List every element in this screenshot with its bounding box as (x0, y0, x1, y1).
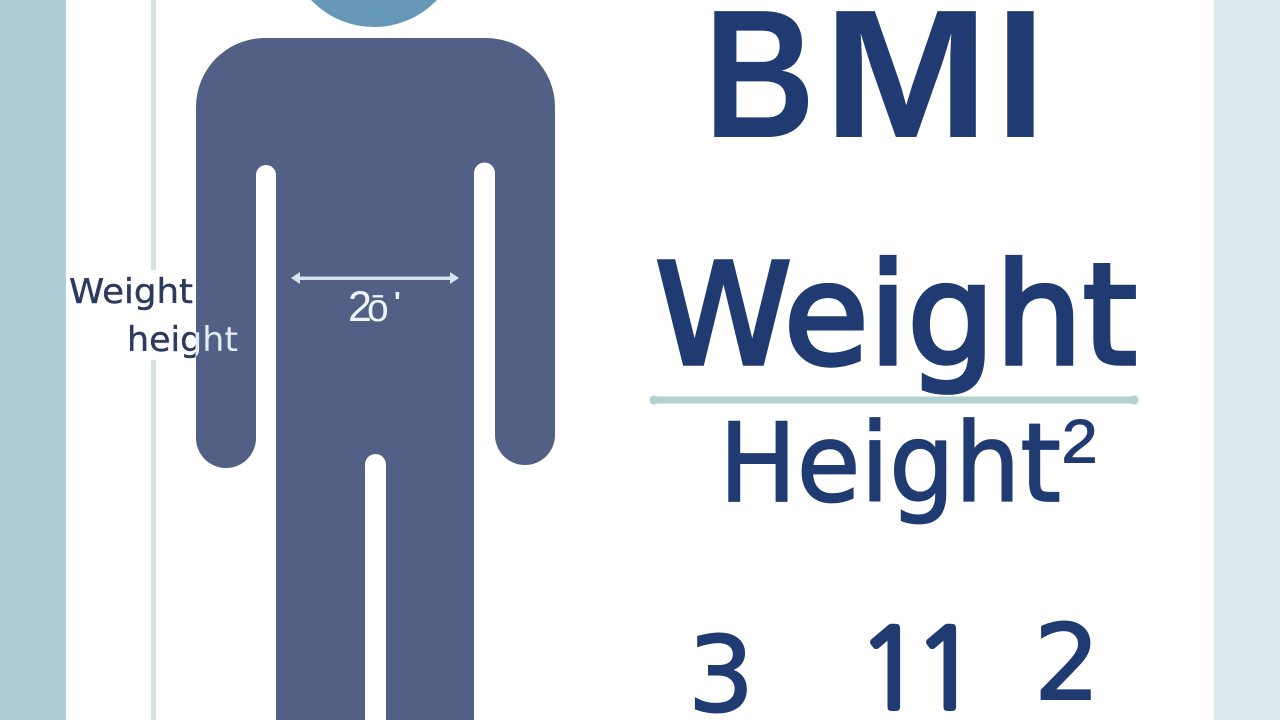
label text: height on white: height (127, 320, 238, 360)
bottom numbers (688, 602, 1100, 720)
right side band (1214, 0, 1280, 720)
waist measurement value: ō (367, 287, 389, 330)
label: weight and height (69, 272, 238, 360)
formula fraction bar (650, 396, 1138, 404)
waist measurement value: ' (394, 286, 401, 317)
formula exponent: ² (1062, 398, 1097, 515)
waist measurement arrow (291, 272, 459, 284)
formula numerator: Weight: Weight (655, 234, 1137, 398)
left side band (0, 0, 66, 720)
label text: Weight: Weight (69, 272, 193, 312)
label text: height on body: height (127, 320, 238, 360)
icon: head (287, 0, 461, 27)
height measuring line (151, 0, 156, 720)
formula denominator: Height: Height (719, 400, 1061, 527)
formula (650, 234, 1138, 527)
waist measurement value: 2 (348, 283, 372, 331)
icon: body silhouette (196, 38, 555, 720)
title: BMI (704, 0, 1046, 176)
person figure (196, 0, 555, 720)
